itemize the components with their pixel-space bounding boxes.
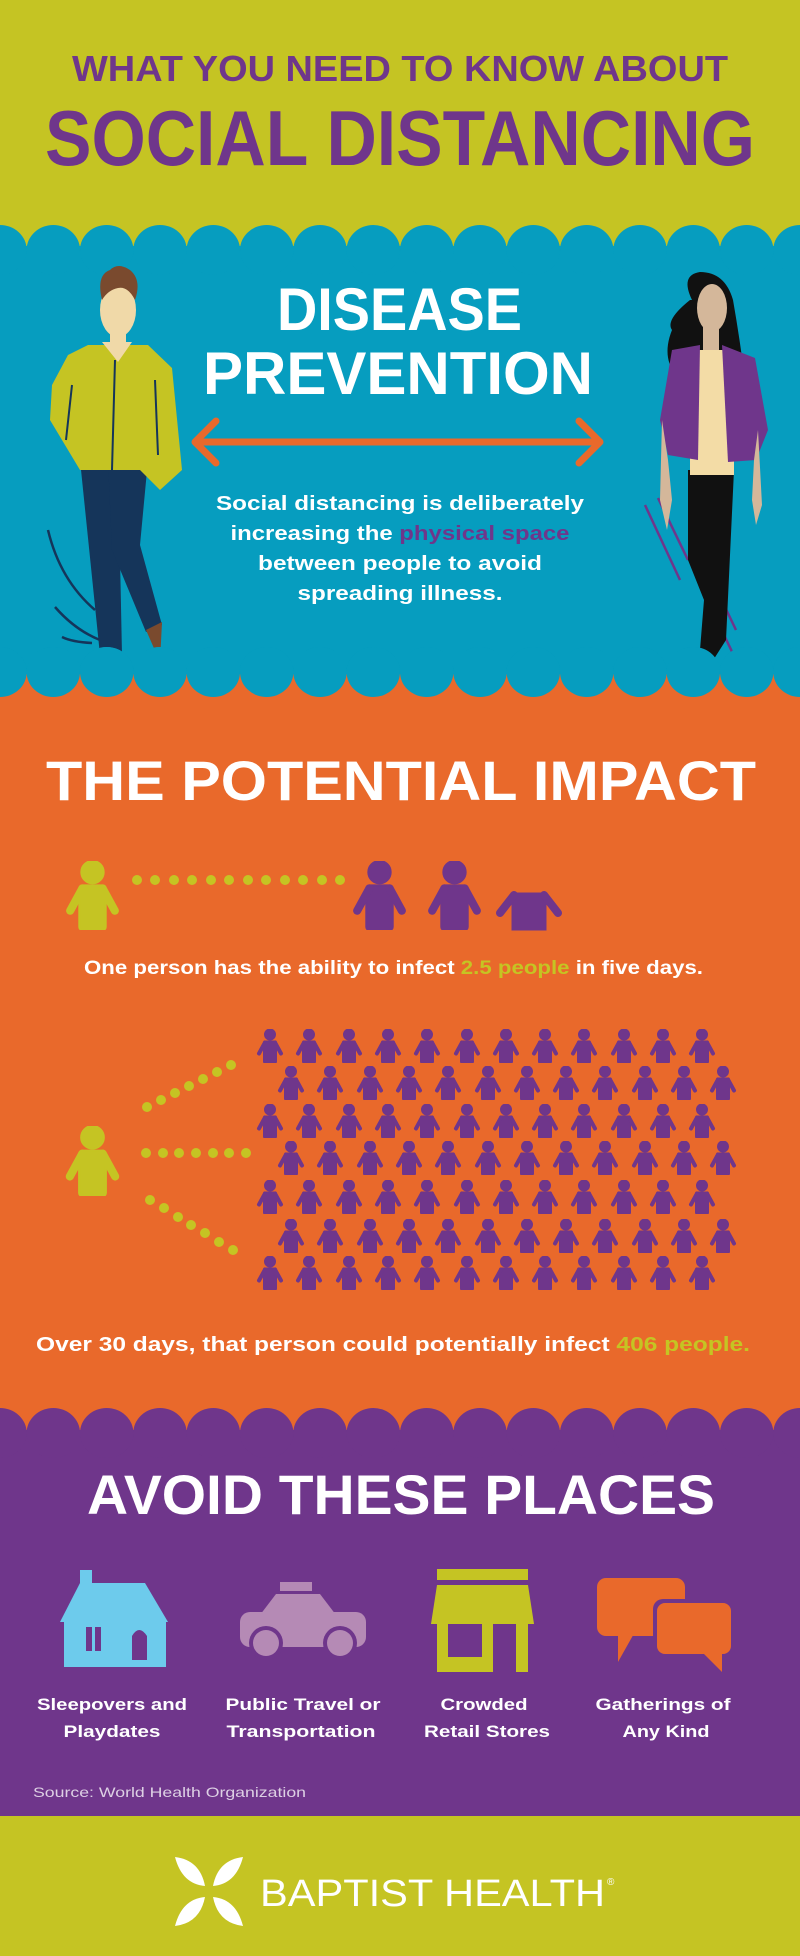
heading: the potential impact: THE POTENTIAL IMPACT — [46, 749, 756, 812]
footer: logo: ® — [607, 1877, 615, 1888]
footer: logo — [0, 1816, 800, 1956]
text: 2.5 people: One person has the ability to infect 2.5 people in five days. — [84, 958, 703, 979]
title: WHAT YOU NEED TO KNOW ABOUT — [72, 48, 728, 89]
arrow: double-headed — [195, 421, 600, 463]
labels: places: Public Travel or — [226, 1695, 381, 1714]
source note: Source: World Health Organization — [33, 1784, 306, 1800]
labels: places: Gatherings of — [596, 1695, 731, 1714]
text: 406 people: Over 30 days, that person could potentially infect 406 people. — [36, 1334, 750, 1356]
text block: definition: increasing the physical space — [230, 523, 570, 545]
chart: one person infects 406 — [70, 1029, 734, 1290]
labels: places: Any Kind — [622, 1722, 710, 1741]
text block: definition: spreading illness. — [298, 583, 502, 605]
icon: store — [431, 1569, 534, 1672]
icon: house — [60, 1570, 168, 1667]
text block: definition — [216, 493, 585, 605]
text block: definition: Social distancing is deliberately — [216, 493, 585, 515]
heading: disease prevention: DISEASE — [277, 276, 522, 343]
background: title band — [0, 0, 800, 250]
icon: logo leaves — [175, 1857, 243, 1926]
panel: disease prevention — [0, 225, 800, 697]
title — [45, 48, 755, 182]
illustration: woman — [645, 272, 768, 662]
labels: places — [37, 1695, 731, 1741]
illustration: man — [48, 266, 182, 674]
icon: chat bubbles — [597, 1578, 735, 1672]
labels: places: Crowded — [440, 1695, 528, 1714]
chart: one person infects 2.5 — [70, 861, 558, 930]
labels: places: Sleepovers and — [37, 1695, 187, 1714]
labels: places: Playdates — [64, 1722, 160, 1741]
icon: car — [240, 1582, 366, 1660]
text block: definition: between people to avoid — [258, 553, 542, 575]
heading: disease prevention: PREVENTION — [203, 340, 593, 407]
panel: avoid these places — [0, 1408, 800, 1818]
labels: places: Transportation — [226, 1722, 376, 1741]
labels: places: Retail Stores — [424, 1722, 550, 1741]
panel: potential impact — [0, 647, 800, 1434]
logo text: BAPTIST HEALTH — [260, 1873, 605, 1915]
heading: avoid these places: AVOID THESE PLACES — [87, 1463, 715, 1526]
heading: disease prevention — [203, 276, 593, 407]
